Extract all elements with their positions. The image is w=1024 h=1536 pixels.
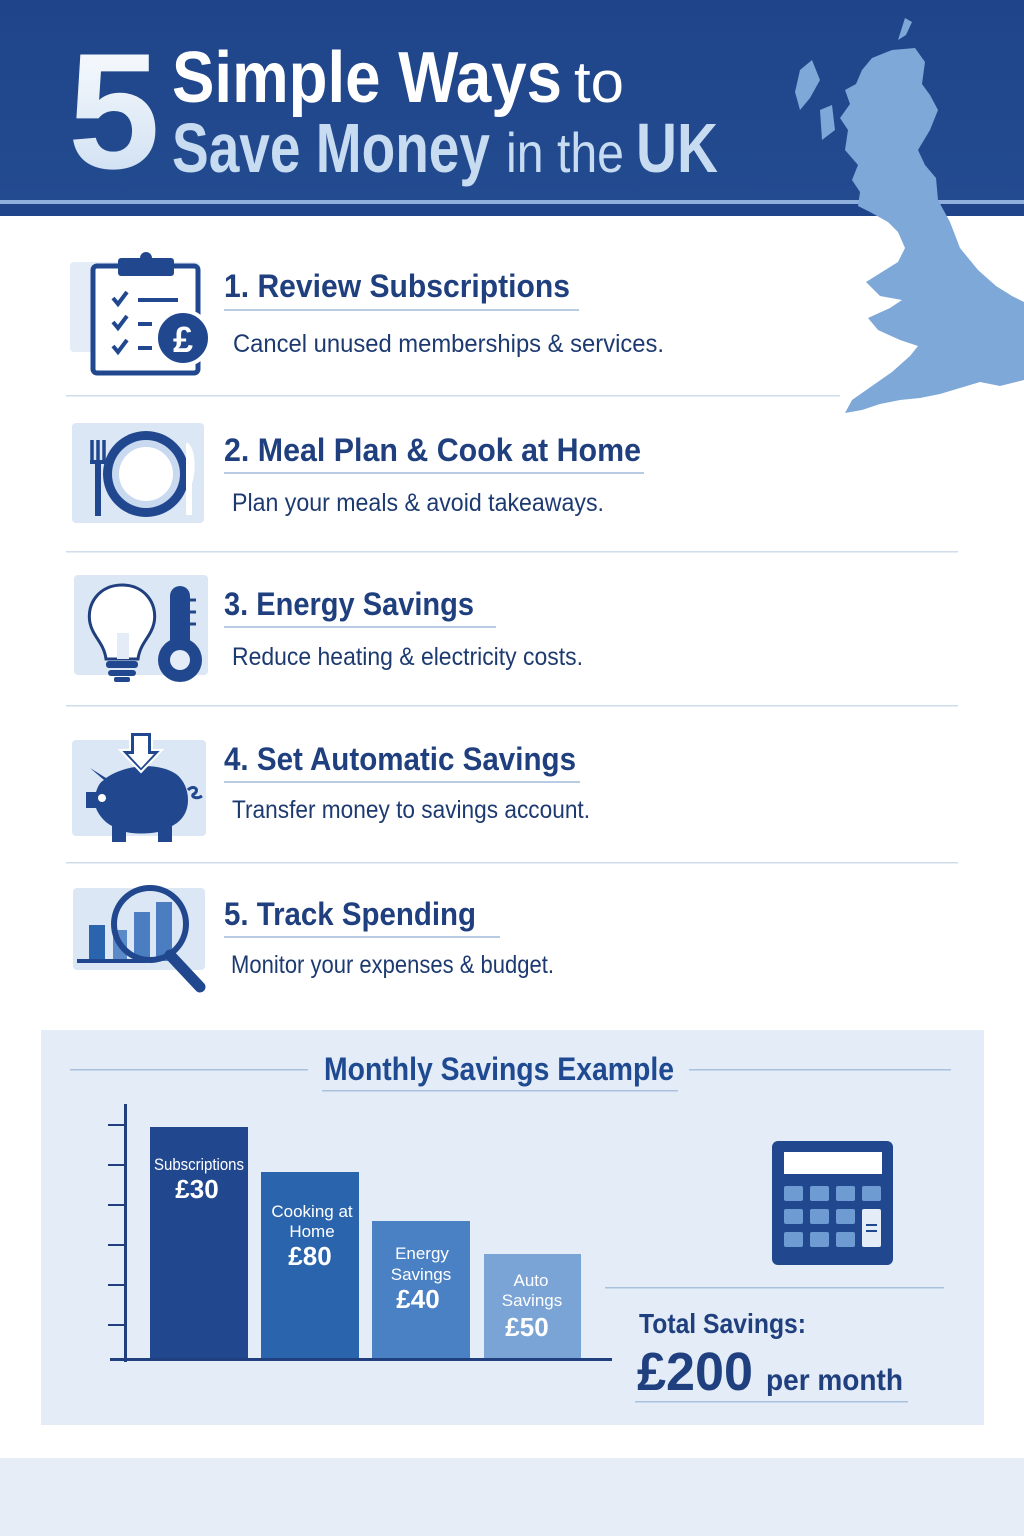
- bar chart: £40: [396, 1284, 440, 1314]
- bar chart: Auto: [514, 1271, 548, 1290]
- bar chart: £80: [288, 1241, 332, 1271]
- title: in the: [506, 121, 624, 184]
- bar chart: Home: [289, 1222, 335, 1241]
- icon: clipboard with pound: £: [173, 319, 193, 360]
- row 2: meal plan: 2. Meal Plan & Cook at Home: [224, 432, 641, 468]
- title: [68, 19, 718, 203]
- row 2: meal plan: Plan your meals & avoid takeaways.: [232, 489, 604, 517]
- title: Simple Ways: [172, 38, 562, 118]
- icon: bulb and thermometer: [74, 575, 208, 682]
- row 5: track spending: Monitor your expenses & budget.: [231, 951, 554, 979]
- row 1: review subscriptions: Cancel unused memberships & services.: [233, 330, 664, 358]
- header band: [0, 0, 1024, 216]
- icon: plate and cutlery: [72, 423, 204, 523]
- row 4: automatic savings: 4. Set Automatic Savings: [224, 741, 576, 777]
- total savings callout: [635, 1308, 908, 1402]
- row 5: track spending: [73, 888, 554, 987]
- row 5: track spending: 5. Track Spending: [224, 896, 476, 932]
- title: UK: [636, 109, 718, 187]
- row 4: automatic savings: [72, 732, 590, 842]
- panel heading: Monthly Savings Example: [324, 1051, 674, 1087]
- total savings callout: Total Savings:: [639, 1308, 806, 1339]
- title: to: [574, 50, 624, 115]
- bar chart: £50: [505, 1312, 549, 1342]
- row 1: review subscriptions: [70, 252, 664, 373]
- panel: monthly savings example: [41, 1030, 984, 1425]
- title: Save Money: [172, 109, 490, 187]
- icon: piggy bank with arrow: [72, 732, 206, 842]
- bar chart: [108, 1104, 612, 1362]
- row 4: automatic savings: Transfer money to savings account.: [232, 796, 590, 824]
- icon: calculator: [772, 1141, 893, 1265]
- bar chart: Savings: [391, 1265, 451, 1284]
- row 1: review subscriptions: 1. Review Subscriptions: [224, 268, 570, 304]
- icon: chart with magnifier: [73, 888, 205, 987]
- icon: clipboard with pound: [70, 252, 210, 373]
- bar chart: Cooking at: [271, 1202, 353, 1221]
- map of UK: [795, 18, 1024, 413]
- bar chart: Energy: [395, 1244, 449, 1263]
- bar chart: Savings: [502, 1291, 562, 1310]
- row 2: meal plan: [72, 423, 644, 523]
- bar chart: £30: [175, 1174, 219, 1204]
- row 3: energy savings: Reduce heating & electricity costs.: [232, 643, 583, 671]
- row 3: energy savings: [74, 575, 583, 682]
- title: 5: [68, 19, 160, 203]
- row 3: energy savings: 3. Energy Savings: [224, 586, 474, 622]
- bar chart: Subscriptions: [154, 1155, 244, 1174]
- total savings callout: per month: [766, 1364, 903, 1397]
- total savings callout: £200: [637, 1342, 753, 1402]
